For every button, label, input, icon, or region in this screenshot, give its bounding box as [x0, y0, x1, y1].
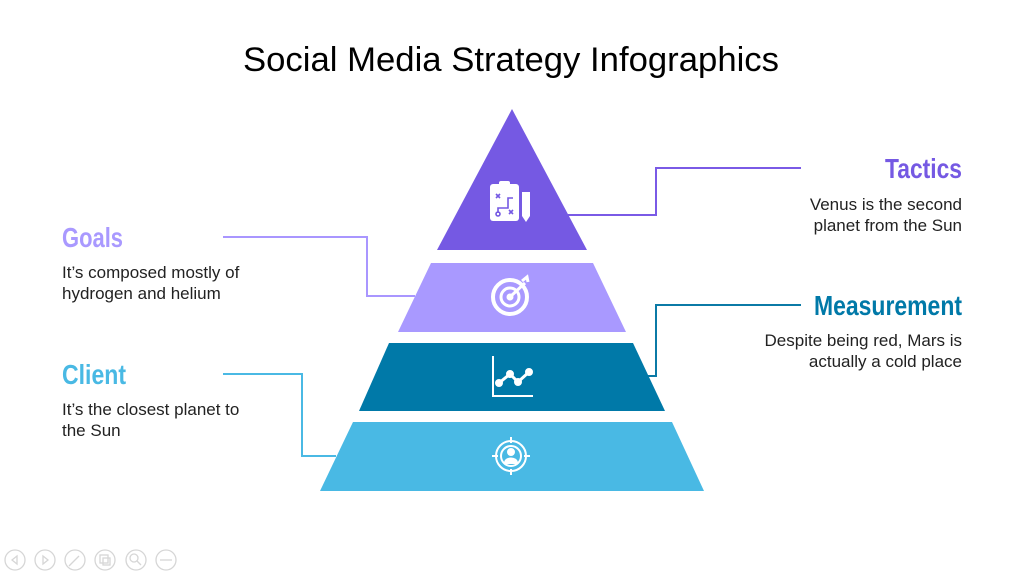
label: measurement: actually a cold place: [809, 352, 962, 371]
label: goals: It’s composed mostly of: [62, 263, 240, 282]
label: tactics: Tactics: [885, 153, 962, 184]
label: measurement: Despite being red, Mars is: [765, 331, 962, 350]
icon: client target: [492, 437, 530, 475]
connector: client: [223, 374, 336, 456]
label: client: the Sun: [62, 421, 121, 440]
label: goals: Goals: [62, 222, 123, 253]
icon: target: [493, 277, 528, 314]
label: client: It’s the closest planet to: [62, 400, 239, 419]
label: goals: [62, 222, 240, 303]
pyramid tier: measurement: [359, 343, 665, 411]
label: tactics: Venus is the second: [810, 195, 962, 214]
pyramid tier: tactics: [437, 109, 587, 250]
label: goals: hydrogen and helium: [62, 284, 221, 303]
icon: line chart: [493, 356, 533, 396]
label: client: Client: [62, 359, 126, 390]
icon: strategy clipboard: [490, 181, 530, 222]
pyramid tier: goals: [398, 263, 626, 332]
connector: goals: [223, 237, 415, 296]
label: measurement: [765, 290, 962, 371]
connector: tactics: [568, 168, 801, 215]
label: tactics: [810, 153, 962, 235]
label: tactics: planet from the Sun: [814, 216, 962, 235]
label: measurement: Measurement: [814, 290, 962, 321]
pyramid tier: client: [320, 422, 704, 491]
slideshow controls: [5, 550, 176, 570]
title: Social Media Strategy Infographics: [243, 41, 779, 79]
label: client: [62, 359, 239, 440]
connector: measurement: [648, 305, 801, 376]
